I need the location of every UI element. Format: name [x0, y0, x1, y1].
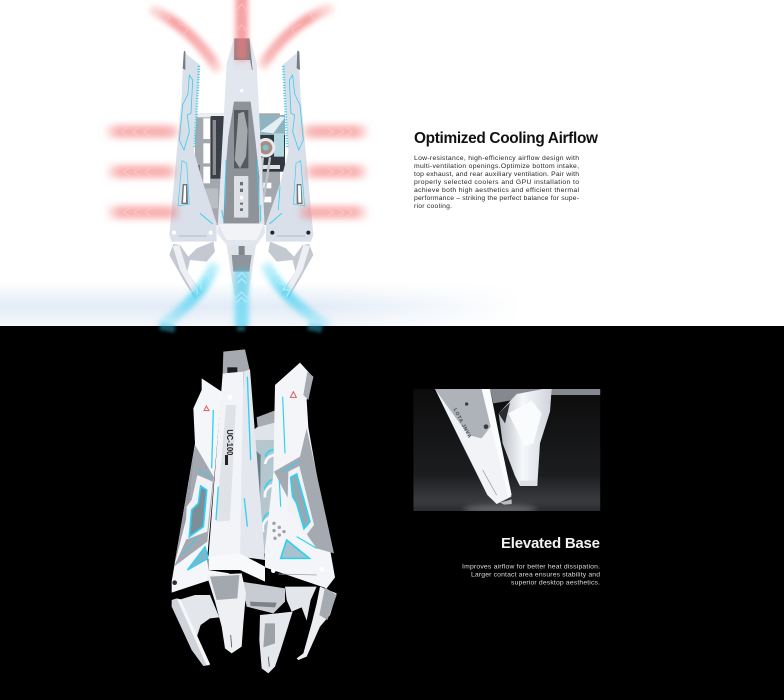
floor haze: [0, 282, 522, 326]
heading: Elevated Base: Elevated Base: [501, 535, 600, 552]
panel: right wing: [265, 363, 335, 588]
arrows: blue intake airflow: [158, 263, 330, 330]
interior: motherboard bay: [195, 113, 285, 225]
arrows: red exhaust top: [150, 0, 333, 72]
text block: cooling description: achieve both high aesthetics and efficient thermal: [414, 187, 579, 194]
text block: elevated base description: Improves airflow for better heat dissipation.: [462, 564, 600, 570]
case legs: [169, 242, 313, 302]
text block: elevated base description: [462, 564, 600, 586]
text block: elevated base description: Larger contact area ensures stability and: [471, 572, 600, 578]
panel: right wing: [266, 51, 313, 242]
text block: cooling description: performance – striking the perfect balance for supe-: [414, 195, 579, 202]
interior: glass and fans: [250, 440, 283, 553]
rear legs: [172, 587, 337, 673]
icon: warning triangle: [204, 406, 209, 411]
heading: Optimized Cooling Airflow: Optimized Cooling Airflow: [414, 130, 598, 147]
front leg: [435, 389, 512, 505]
text block: cooling description: properly selected coolers and GPU installation to: [414, 179, 579, 186]
text block: elevated base description: superior desktop aesthetics.: [511, 580, 600, 586]
panel: black elevated base section: [154, 321, 600, 674]
panel: left wing: [169, 51, 217, 242]
rear leg: [499, 389, 552, 486]
panel: white airflow section: [0, 0, 784, 330]
text block: cooling description: multi-ventilation openings.Optimize bottom intake,: [414, 163, 579, 170]
panel: central column: [208, 349, 265, 582]
panel: central column: [217, 38, 265, 245]
text block: cooling description: top exhaust, and rear auxiliary ventilation. Pair with: [414, 171, 579, 178]
front leg and underside: [207, 573, 285, 667]
label: leg engraving: LOTA JNVA: [452, 407, 473, 440]
text block: cooling description: rior cooling.: [414, 203, 452, 210]
arrows: red exhaust right: [300, 125, 370, 219]
vent holes: [272, 522, 286, 540]
panel: left wing: [172, 378, 230, 593]
blue glow below white section: [160, 326, 322, 331]
back riser: [250, 410, 285, 553]
label: UC-100 on column: UC-100: [225, 429, 234, 456]
illustration: PC case front with airflow: [103, 0, 370, 330]
top bar: [490, 389, 600, 403]
text block: cooling description: Low-resistance, high-efficiency airflow design with: [414, 155, 579, 162]
arrows: red exhaust left: [103, 125, 179, 219]
text block: cooling description: [414, 155, 579, 210]
photo: elevated base close-up: [413, 389, 600, 514]
illustration: PC case angled view: [172, 349, 337, 673]
icon: warning triangle: [290, 392, 296, 397]
icon: CPU cooler: [256, 138, 275, 157]
